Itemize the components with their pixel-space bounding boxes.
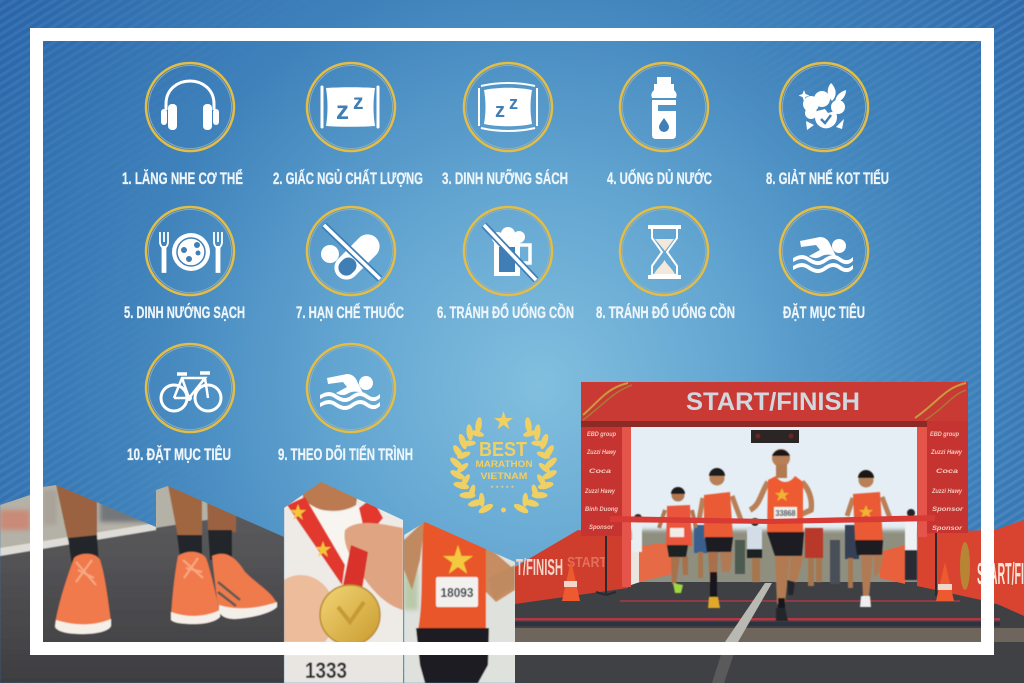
label 5: 8. GIẢT NHẾ KOT TIỂU bbox=[766, 169, 889, 188]
label 9: 8. TRÁNH ĐỔ UỐNG CỒN bbox=[596, 302, 735, 322]
label 2: 2. GIẤC NGỦ CHẤT LƯỢNG bbox=[273, 169, 423, 188]
runner 2 bbox=[699, 468, 741, 608]
badge: best marathon vietnam laurel: ★★★★★ bbox=[490, 484, 516, 489]
start finish gate: EBD group bbox=[587, 432, 616, 438]
item 11 bicycle bbox=[127, 344, 234, 464]
item 8 no beer bbox=[437, 207, 574, 322]
icon: pillow: z bbox=[495, 100, 505, 122]
item 6 plate bbox=[124, 207, 245, 322]
icon: no medicine bbox=[321, 225, 385, 285]
label 8: 6. TRÁNH ĐỔ UỐNG CỒN bbox=[437, 302, 574, 322]
background crowd bbox=[632, 509, 917, 588]
start finish gate: Sponsor bbox=[932, 526, 963, 532]
start finish gate bbox=[581, 382, 968, 587]
icon: pillow: z bbox=[353, 91, 364, 114]
icon: hourglass bbox=[648, 225, 681, 279]
left barrier: START bbox=[567, 554, 607, 571]
icon: pillow bbox=[322, 87, 378, 127]
item 2 pillow bbox=[273, 63, 423, 188]
icon: water bottle bbox=[651, 77, 677, 139]
item 4 bottle bbox=[607, 63, 712, 188]
label 11: 10. ĐẶT MỤC TIÊU bbox=[127, 445, 231, 464]
badge: best marathon vietnam laurel bbox=[448, 411, 559, 515]
right barrier bbox=[880, 505, 1024, 616]
start finish gate: Binh Duong bbox=[585, 507, 618, 513]
photo: runner torso bbox=[404, 520, 516, 683]
label 12: 9. THEO DÕI TIẾN TRÌNH bbox=[278, 444, 413, 464]
photo: finish line bbox=[515, 382, 1024, 683]
icon: bicycle bbox=[161, 373, 221, 411]
start finish gate: Coca bbox=[589, 469, 612, 475]
runner 3 centre bbox=[750, 449, 811, 621]
icon: swimmer bbox=[793, 237, 853, 273]
bib text below frame: 1333 bbox=[305, 658, 347, 683]
start finish gate: Coca bbox=[936, 469, 959, 475]
icon: swimmer bbox=[320, 374, 380, 410]
label 6: 5. DINH NƯỚNG SẠCH bbox=[124, 303, 245, 322]
start finish gate: Zuzzi Hawy bbox=[584, 489, 616, 495]
item 10 swim bbox=[780, 207, 868, 322]
photo: running shoes on road bbox=[0, 480, 284, 683]
icon: pillow bbox=[479, 83, 537, 131]
start finish gate: Sponsor bbox=[932, 507, 964, 513]
icon: plate and cutlery bbox=[160, 232, 222, 272]
left leg bbox=[55, 480, 111, 634]
label 4: 4. UỐNG DỦ NƯỚC bbox=[607, 168, 712, 188]
left barrier: T/FINISH bbox=[516, 554, 563, 580]
start finish gate: EBD group bbox=[930, 432, 959, 438]
icon: herbal wellness bbox=[798, 83, 846, 130]
start finish gate: Sponsor bbox=[589, 525, 614, 531]
icon: headphones bbox=[161, 81, 219, 130]
start finish gate: Zuzzi Hawy bbox=[931, 489, 963, 495]
photo: medal bbox=[284, 480, 404, 683]
item 12 swim bbox=[278, 344, 413, 464]
runner 1 bbox=[659, 487, 696, 593]
gate heading: START/FINISH bbox=[686, 388, 860, 416]
bib number: 18093 bbox=[440, 585, 474, 600]
right legs bbox=[168, 485, 277, 624]
finish ribbon bbox=[610, 515, 935, 524]
badge: best marathon vietnam laurel: BEST bbox=[479, 439, 527, 461]
sky and road base bbox=[515, 425, 1024, 683]
start finish gate: Zuzzi Hawy bbox=[586, 450, 617, 456]
item 5 wellness bbox=[766, 63, 889, 188]
item 9 hourglass bbox=[596, 207, 735, 322]
label 10: ĐẶT MỤC TIÊU bbox=[783, 303, 865, 322]
start finish gate: Zuzzi Hawy bbox=[930, 450, 963, 456]
left barrier bbox=[515, 510, 672, 604]
item 3 pillow bbox=[442, 63, 568, 188]
item 7 no pills bbox=[296, 207, 404, 322]
icon: no alcohol bbox=[484, 225, 536, 280]
label 7: 7. HẠN CHẾ THUỐC bbox=[296, 302, 404, 322]
label 1: 1. LĂNG NHE CƠ THỂ bbox=[122, 169, 243, 188]
badge: best marathon vietnam laurel: VIETNAM bbox=[480, 471, 528, 482]
item 1 headphones bbox=[122, 63, 243, 188]
icon: pillow: z bbox=[509, 93, 518, 113]
icon: pillow: z bbox=[336, 95, 349, 125]
bib number: 33868 bbox=[776, 509, 796, 518]
badge: best marathon vietnam laurel: MARATHON bbox=[476, 459, 533, 470]
label 3: 3. DINH NƯỠNG SÁCH bbox=[442, 168, 568, 188]
runner 4 bbox=[847, 470, 890, 607]
